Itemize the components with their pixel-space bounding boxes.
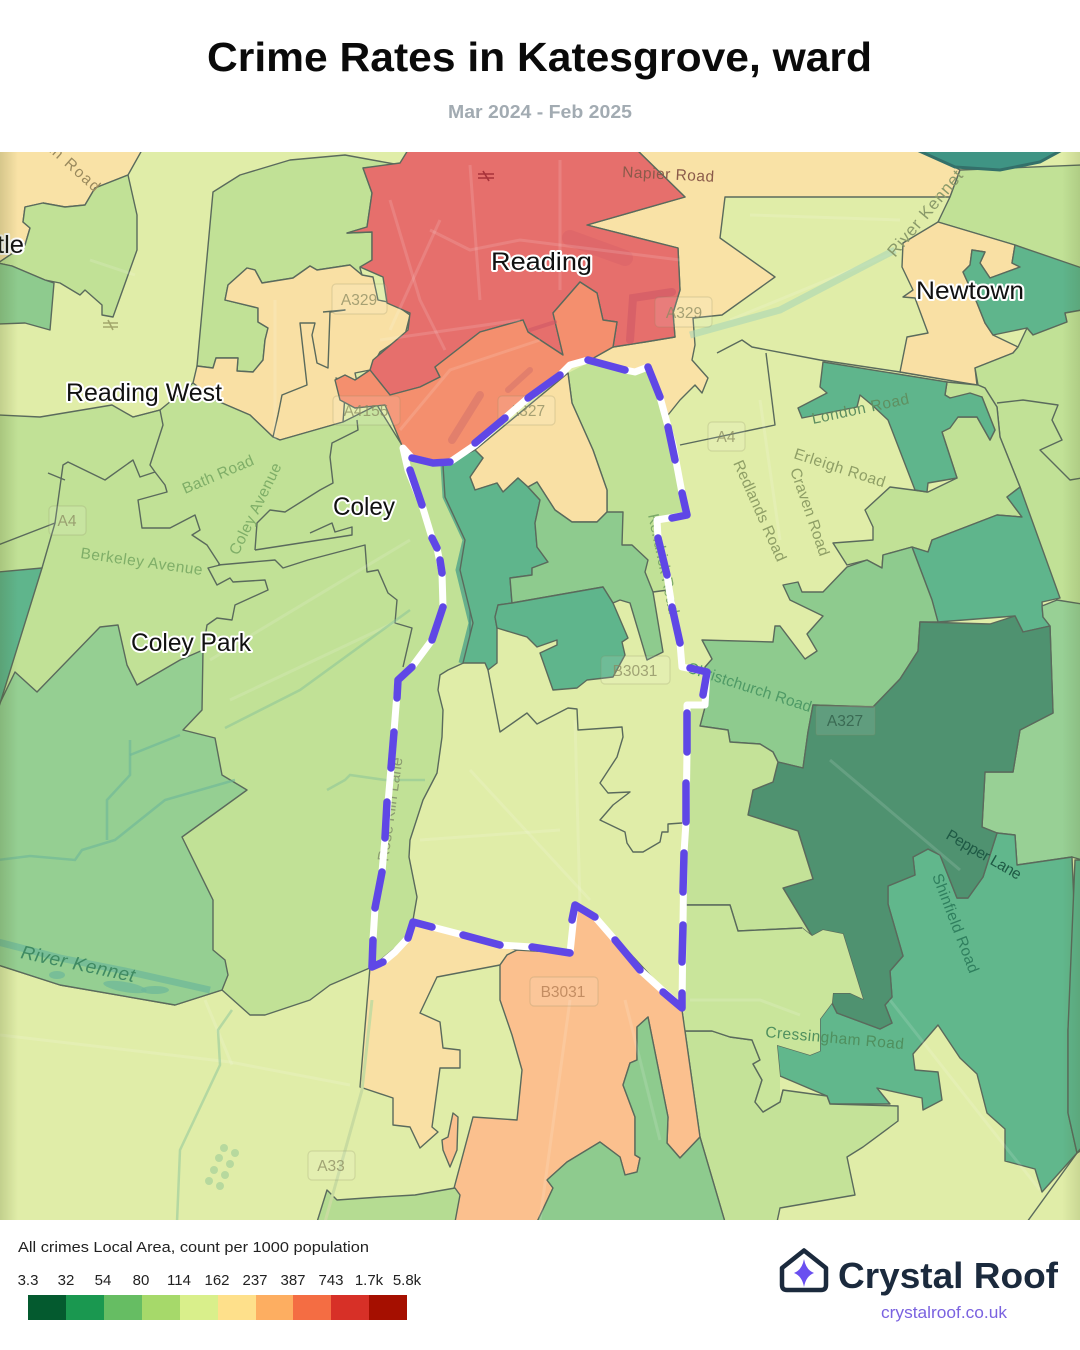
- area: far-east strip: [1068, 860, 1080, 1153]
- river: canal edge by teal block: [443, 465, 471, 663]
- legend colour bar: [28, 1295, 407, 1320]
- road label: Berkeley Avenue: Berkeley Avenue: [79, 545, 204, 579]
- area: far-east lower green: [982, 600, 1080, 865]
- area: north-east boundary lines: [716, 339, 954, 382]
- area: central teal block: [443, 450, 548, 670]
- area: south-east mid green lower: [682, 1010, 898, 1222]
- river: north-east waterway: [690, 250, 895, 335]
- road shield: B3031 south: [530, 977, 598, 1006]
- road label: Pepper Lane: Pepper Lane: [943, 827, 1024, 883]
- river: ponds south-west: [205, 1144, 239, 1190]
- road shield: A4 east: [708, 422, 745, 451]
- road label: Craven Road: Craven Road: [786, 466, 832, 558]
- logo wordmark: Crystal Roof: [838, 1255, 1059, 1296]
- area: Newtown yellow: [900, 222, 1020, 385]
- legend tick labels: 743: [318, 1272, 344, 1289]
- logo url: crystalroof.co.uk: [881, 1304, 1008, 1322]
- icon: rail station Reading: [478, 171, 494, 181]
- logo: Crystal Roof: [782, 1250, 1059, 1322]
- road label: Kendrick Road: Kendrick Road: [644, 512, 682, 616]
- area: top-left yellow: [0, 150, 142, 263]
- legend: [18, 1239, 422, 1320]
- area: far-left green box: [0, 263, 54, 330]
- area: bottom green: [317, 1188, 460, 1222]
- road shield: A4155: A4155: [344, 403, 388, 420]
- road shield: A329 west: A329: [341, 292, 377, 309]
- legend tick labels: 237: [242, 1272, 268, 1289]
- area: north-west green: [0, 175, 137, 317]
- area: central north yellow: [470, 373, 607, 522]
- area: far-left green wedge: [0, 568, 42, 710]
- road shield: B3031 south: B3031: [541, 984, 585, 1001]
- road shield: B3031 north: B3031: [613, 663, 657, 680]
- road shield: A4 west: [49, 506, 86, 535]
- road shield: A327: A327: [509, 403, 545, 420]
- area: Coley internal boundaries: [133, 410, 268, 650]
- area: far-east green: [975, 310, 1080, 606]
- area: ward interior boundary: [488, 670, 682, 852]
- road shield: A4 west: A4: [58, 513, 77, 530]
- place label: Reading West: Reading West: [66, 379, 222, 407]
- legend tick labels: 1.7k: [355, 1272, 384, 1289]
- road shield: A4 east: A4: [717, 429, 736, 446]
- road label: Erleigh Road: Erleigh Road: [792, 446, 887, 491]
- area: Newtown dark green: [963, 245, 1080, 335]
- legend tick labels: 80: [133, 1272, 149, 1289]
- place label: Reading: Reading: [491, 248, 592, 276]
- area: south-east mid green upper: [686, 707, 813, 936]
- road shield: A327 east: A327: [827, 713, 863, 730]
- legend tick labels: 32: [58, 1272, 74, 1289]
- title: Crime Rates in Katesgrove, ward: [207, 34, 872, 80]
- area: top-right river: [917, 150, 1062, 170]
- area: south-east dark green: [777, 833, 1077, 1192]
- road shield: A4155: [333, 396, 400, 425]
- road label: London Road: London Road: [810, 391, 911, 428]
- road label: River Kennet west: River Kennet: [19, 942, 137, 987]
- place label: Coley Park: Coley Park: [131, 629, 251, 657]
- road label: Coley Avenue: Coley Avenue: [226, 460, 285, 558]
- area: north-east yellow: [587, 150, 960, 415]
- area: south yellow: [360, 922, 517, 1148]
- area: Coley Park darker green: [0, 625, 247, 1005]
- river: west Kennet band: [0, 735, 235, 996]
- area: north green block: [197, 155, 400, 372]
- area: east mid green: [833, 382, 1022, 568]
- map edge shading: [0, 152, 1080, 1220]
- area: south-east middle: [684, 905, 863, 1112]
- river: Coley streams and railway: [177, 610, 425, 1222]
- road label: Shinfield Road: Shinfield Road: [928, 871, 982, 975]
- place label: Coley: Coley: [333, 493, 395, 521]
- road label: Redlands Road: Redlands Road: [729, 458, 789, 564]
- legend heading: All crimes Local Area, count per 1000 population: [18, 1239, 369, 1256]
- road label: top-left road: an Road: [41, 137, 103, 195]
- icon: rail station Reading West: [103, 320, 118, 330]
- area: city-centre orange-red: [335, 282, 617, 463]
- road label: River Kennet north-east: River Kennet: [884, 166, 967, 261]
- legend tick labels: [18, 1272, 422, 1289]
- ward boundary: Katesgrove: [372, 360, 707, 1008]
- area: central dark green block: [495, 587, 628, 690]
- area: east lighter green: [700, 547, 938, 768]
- boundary white casing: [372, 360, 707, 1008]
- road shield: B3031 north: [601, 656, 670, 684]
- road label: Napier Road: Napier Road: [622, 164, 715, 186]
- area: Reading West yellow: [193, 265, 410, 440]
- area: south green inset: [537, 1017, 725, 1222]
- legend tick labels: 54: [95, 1272, 111, 1289]
- area: south-east corner line: [1027, 1147, 1080, 1222]
- streets: faint road network: [0, 160, 1040, 1220]
- area: central green block: [510, 482, 663, 660]
- subtitle: date range: Mar 2024 - Feb 2025: [448, 102, 632, 122]
- area: darkest green: [748, 616, 1053, 1029]
- road shield: A329 east: [655, 297, 712, 327]
- area: east dark green block: [912, 487, 1060, 632]
- area: London Road dark green: [798, 362, 995, 492]
- legend tick labels: 114: [167, 1272, 191, 1289]
- road shield: A329 west: [332, 284, 387, 314]
- legend tick labels: 162: [204, 1272, 230, 1289]
- area: west green: [0, 383, 470, 1015]
- legend tick labels: 3.3: [18, 1272, 38, 1289]
- icon: purple star: [794, 1259, 814, 1287]
- area: interior boundary lines in Reading West: [273, 310, 345, 437]
- area: Reading red: [347, 150, 685, 395]
- road shield: A327 east: [816, 706, 875, 735]
- area: central north green inside ward: [568, 362, 688, 592]
- road label: Cressingham Road: Cressingham Road: [765, 1024, 905, 1053]
- road shield: A33: [308, 1151, 355, 1180]
- road shield: A329 east: A329: [666, 305, 702, 322]
- legend tick labels: 387: [280, 1272, 306, 1289]
- icon: house outline: [782, 1250, 826, 1290]
- road shield: A327: [498, 396, 555, 425]
- railway: city-centre rail details: [452, 238, 672, 440]
- road label: Bath Road: Bath Road: [180, 452, 257, 498]
- legend tick labels: 5.8k: [393, 1272, 422, 1289]
- road shield: A33: A33: [317, 1158, 345, 1175]
- area: small orange sliver: [442, 1113, 458, 1167]
- boundary purple dashes: [372, 360, 707, 1008]
- area: south orange: [445, 907, 700, 1222]
- area: north-east green: [938, 165, 1080, 270]
- place label: Newtown: Newtown: [916, 277, 1024, 305]
- road label: Rose Kiln Lane: Rose Kiln Lane: [375, 756, 407, 863]
- line: A33 road corridor: [325, 1000, 372, 1222]
- road label: Christchurch Road: Christchurch Road: [685, 660, 814, 716]
